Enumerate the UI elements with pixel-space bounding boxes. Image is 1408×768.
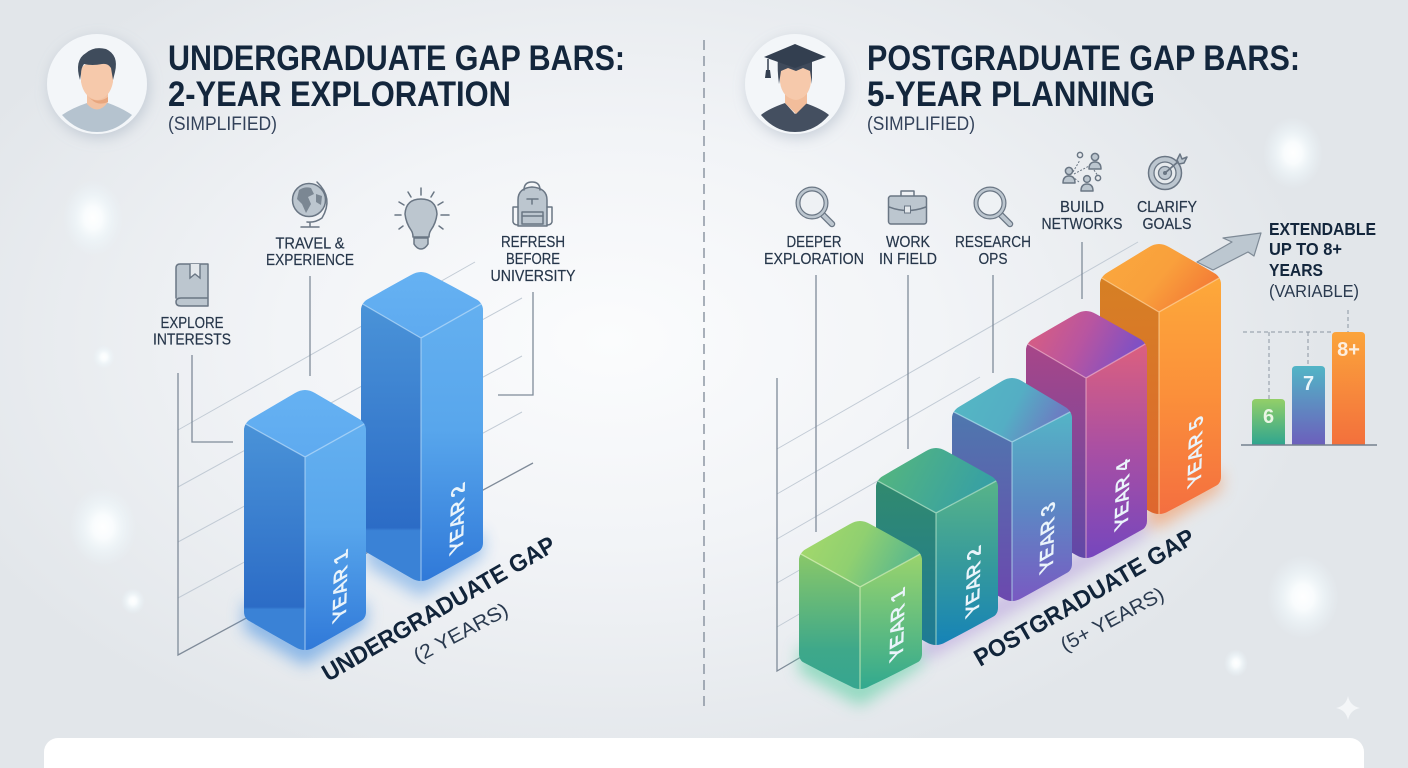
bar: postgraduate year 1: YEAR 1 xyxy=(885,583,909,666)
label: build networks xyxy=(1042,152,1122,233)
label: refresh before university xyxy=(490,182,576,285)
heading: undergraduate title xyxy=(168,39,625,135)
label: build networks: BUILD xyxy=(1060,199,1104,216)
callout: extendable up to 8+ years: EXTENDABLE xyxy=(1269,219,1376,239)
label: clarify goals xyxy=(1137,154,1197,233)
label: deeper exploration xyxy=(764,189,864,268)
callout: extendable up to 8+ years: (VARIABLE) xyxy=(1269,281,1359,301)
callout: extendable up to 8+ years: UP TO 8+ xyxy=(1269,239,1342,259)
heading: postgraduate title xyxy=(867,39,1300,135)
label: research ops xyxy=(955,189,1031,268)
icon: research magnifier xyxy=(976,189,1010,224)
bar: year 7: 7 xyxy=(1303,373,1314,395)
panel: postgraduate header xyxy=(745,34,1300,135)
label: work in field: WORK xyxy=(886,234,930,251)
heading: undergraduate title: UNDERGRADUATE GAP BARS: xyxy=(168,39,625,78)
bar: undergraduate year 1 xyxy=(244,387,366,653)
icon: globe xyxy=(292,182,327,227)
bar: postgraduate year 2: YEAR 2 xyxy=(961,542,985,622)
heading: undergraduate title: 2-YEAR EXPLORATION xyxy=(168,75,511,114)
bar: postgraduate year 5 xyxy=(1100,241,1221,517)
axis label: undergraduate gap: UNDERGRADUATE GAP xyxy=(318,531,560,687)
axis label: postgraduate gap: (5+ YEARS) xyxy=(1057,583,1168,656)
icon: people network xyxy=(1063,152,1101,191)
axis label: postgraduate gap: POSTGRADUATE GAP xyxy=(970,524,1200,672)
label: explore interests xyxy=(153,264,231,348)
icon: magnifier xyxy=(798,189,832,224)
bar: undergraduate year 1: YEAR 1 xyxy=(328,545,352,627)
bar: year 6: 6 xyxy=(1263,406,1274,428)
label: research ops: OPS xyxy=(978,251,1008,268)
label: refresh before university: UNIVERSITY xyxy=(490,268,576,285)
label: clarify goals: CLARIFY xyxy=(1137,199,1197,216)
heading: postgraduate title: 5-YEAR PLANNING xyxy=(867,75,1155,114)
bar: postgraduate year 5: YEAR 5 xyxy=(1183,411,1207,492)
bar: undergraduate year 2 xyxy=(361,269,483,584)
icon: backpack xyxy=(513,182,552,226)
heading: postgraduate title: POSTGRADUATE GAP BARS: xyxy=(867,39,1300,78)
label: build networks: NETWORKS xyxy=(1042,216,1122,233)
icon: target xyxy=(1148,154,1187,190)
avatar: postgraduate student xyxy=(745,34,845,134)
panel: postgraduate chart xyxy=(777,233,1261,706)
bar: postgraduate year 4 xyxy=(1026,308,1147,561)
label: explore interests: EXPLORE xyxy=(160,315,224,332)
bar: postgraduate year 3 xyxy=(952,375,1072,604)
panel: undergraduate chart xyxy=(178,262,560,687)
label: travel and experience: TRAVEL & xyxy=(276,236,345,252)
label: work in field: IN FIELD xyxy=(879,251,937,268)
label: work in field xyxy=(879,191,937,268)
arrow: extension to 8+ years xyxy=(1197,233,1261,270)
label: refresh before university: REFRESH xyxy=(501,234,565,251)
callout: extendable up to 8+ years xyxy=(1269,219,1376,301)
label: refresh before university: BEFORE xyxy=(506,251,560,268)
chart: extended years 6 to 8+ xyxy=(1241,310,1377,445)
bar: postgraduate year 3: YEAR 3 xyxy=(1035,498,1059,578)
label: clarify goals: GOALS xyxy=(1142,216,1192,233)
label: travel and experience: EXPERIENCE xyxy=(266,252,354,269)
callout: extendable up to 8+ years: YEARS xyxy=(1269,260,1323,280)
label: deeper exploration: DEEPER xyxy=(786,234,842,251)
icon: book xyxy=(176,264,208,306)
panel: undergraduate header xyxy=(47,34,625,135)
bar: postgraduate year 2 xyxy=(876,445,998,648)
icon: light bulb xyxy=(395,188,449,249)
panel: bottom white card xyxy=(44,738,1364,768)
label: research ops: RESEARCH xyxy=(955,234,1031,251)
label: travel and experience xyxy=(266,182,354,269)
heading: postgraduate title: (SIMPLIFIED) xyxy=(867,114,975,135)
avatar: undergraduate student xyxy=(47,34,147,134)
bar: undergraduate year 2: YEAR 2 xyxy=(445,479,469,559)
bar: year 8+: 8+ xyxy=(1337,339,1360,361)
heading: undergraduate title: (SIMPLIFIED) xyxy=(168,114,277,135)
label: explore interests: INTERESTS xyxy=(153,332,231,348)
axis label: undergraduate gap: (2 YEARS) xyxy=(410,599,512,667)
bar: postgraduate year 4: YEAR 4 xyxy=(1110,454,1134,535)
bar: postgraduate year 1 xyxy=(799,518,922,692)
label: deeper exploration: EXPLORATION xyxy=(764,251,864,268)
icon: briefcase xyxy=(888,191,926,224)
